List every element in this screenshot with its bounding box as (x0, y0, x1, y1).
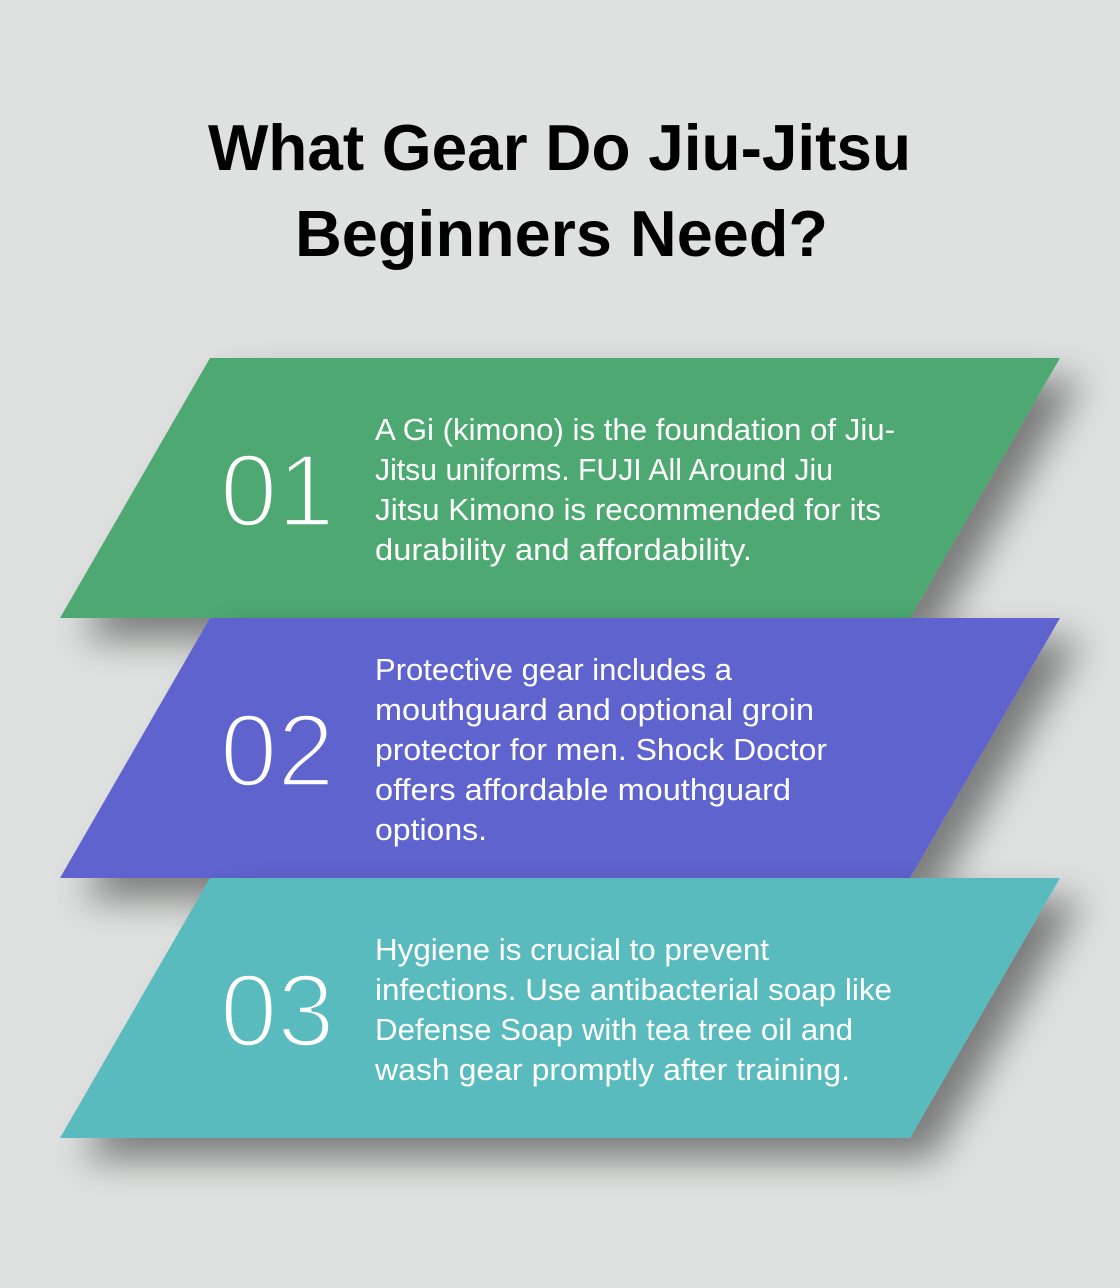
text: gi description: durability and affordability. (375, 532, 752, 567)
number 02: 02 (220, 693, 335, 808)
text: protective gear description: protector for men. Shock Doctor (375, 732, 827, 767)
title (208, 111, 911, 270)
panel: step 03 hygiene (60, 878, 1060, 1138)
text: protective gear description (375, 652, 827, 847)
parallelogram: green (60, 358, 1060, 618)
title: Beginners Need? (295, 197, 828, 270)
text: hygiene description (374, 932, 892, 1087)
title: What Gear Do Jiu-Jitsu (208, 111, 911, 184)
parallelogram: indigo (60, 618, 1060, 878)
text: hygiene description: Hygiene is crucial to prevent (375, 932, 769, 967)
panel: step 01 gi (60, 358, 1060, 618)
panel: step 02 protective gear (60, 618, 1060, 878)
text: protective gear description: offers affordable mouthguard (375, 772, 791, 807)
number 01: 01 (220, 433, 335, 548)
text: protective gear description: mouthguard and optional groin (375, 692, 814, 727)
parallelogram: teal (60, 878, 1060, 1138)
text: hygiene description: wash gear promptly after training. (374, 1052, 850, 1087)
text: protective gear description: Protective gear includes a (375, 652, 733, 687)
text: protective gear description: options. (375, 812, 487, 847)
text: gi description: A Gi (kimono) is the foundation of Jiu- (375, 412, 895, 447)
text: hygiene description: Defense Soap with tea tree oil and (375, 1012, 853, 1047)
text: gi description (375, 412, 895, 567)
number 03: 03 (220, 953, 335, 1068)
text: gi description: Jitsu Kimono is recommended for its (375, 492, 881, 527)
text: hygiene description: infections. Use antibacterial soap like (375, 972, 892, 1007)
text: gi description: Jitsu uniforms. FUJI All Around Jiu (375, 452, 833, 487)
